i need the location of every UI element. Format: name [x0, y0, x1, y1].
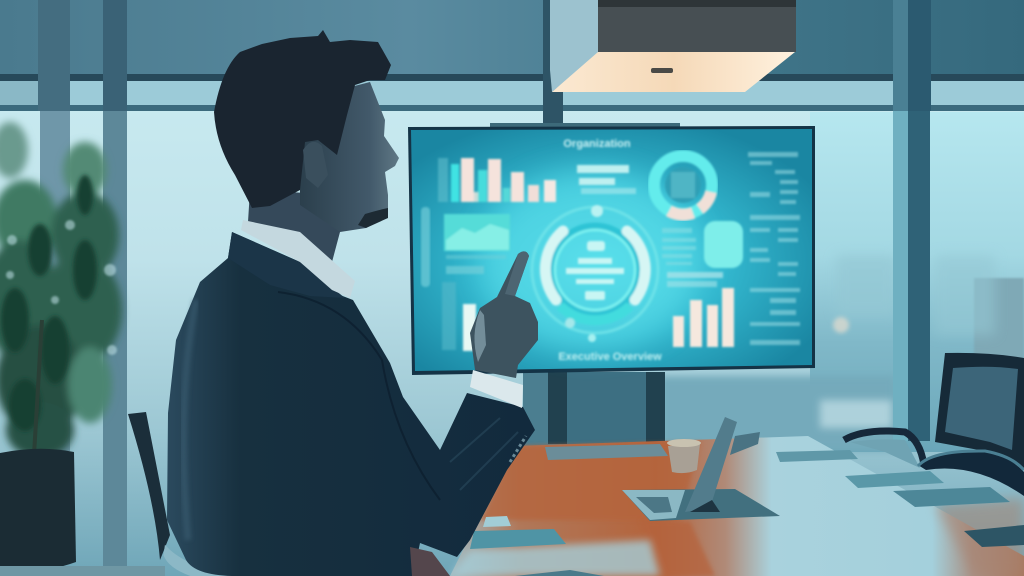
hand — [470, 251, 538, 378]
jacket lapel — [228, 232, 345, 298]
radial center text lines — [566, 241, 624, 300]
table items — [470, 417, 1024, 576]
plant pot — [0, 449, 76, 571]
ceiling lamp — [550, 0, 796, 92]
shirt collar — [241, 220, 355, 298]
screen footer title: Executive Overview — [558, 351, 662, 363]
monitor stand — [523, 372, 665, 446]
dashboard screen — [408, 123, 815, 375]
hair — [214, 30, 391, 208]
cuff — [470, 370, 523, 408]
tablet: far right — [776, 450, 858, 462]
central radial diagram — [532, 205, 658, 342]
area chart panel — [444, 214, 510, 274]
right chairs — [844, 353, 1024, 496]
coffee cup — [668, 444, 700, 473]
tablet: near — [470, 529, 566, 549]
laptop — [622, 417, 780, 521]
beard — [358, 208, 388, 228]
jacket — [167, 232, 535, 576]
small text block: middle right — [662, 228, 696, 265]
rounded card — [704, 221, 743, 268]
tablet: far centre — [545, 444, 668, 460]
tablet: small near — [483, 516, 511, 527]
neck — [248, 190, 345, 262]
conference table — [450, 436, 1024, 576]
screen glow — [480, 170, 700, 350]
pen stand — [730, 432, 760, 455]
screen heading: Organization — [563, 138, 631, 150]
head — [300, 82, 399, 232]
floor edge — [0, 566, 165, 576]
side text column — [748, 152, 800, 345]
bar chart: top left — [438, 158, 556, 202]
donut chart — [654, 156, 712, 215]
left chair — [128, 412, 232, 576]
text lines: top middle — [577, 165, 636, 194]
presenter — [167, 30, 538, 576]
vertical axis label — [421, 207, 430, 287]
tablet: right edge — [964, 525, 1024, 547]
lower hand — [410, 547, 450, 576]
tablet: right row two — [893, 487, 1010, 507]
city skyline — [820, 255, 1024, 428]
bar chart: bottom right — [667, 272, 734, 347]
tablet: bottom — [515, 570, 604, 576]
plant — [0, 122, 122, 571]
ear — [303, 142, 328, 188]
bar chart: bottom left — [442, 274, 520, 351]
tablet: right row one — [845, 471, 944, 488]
